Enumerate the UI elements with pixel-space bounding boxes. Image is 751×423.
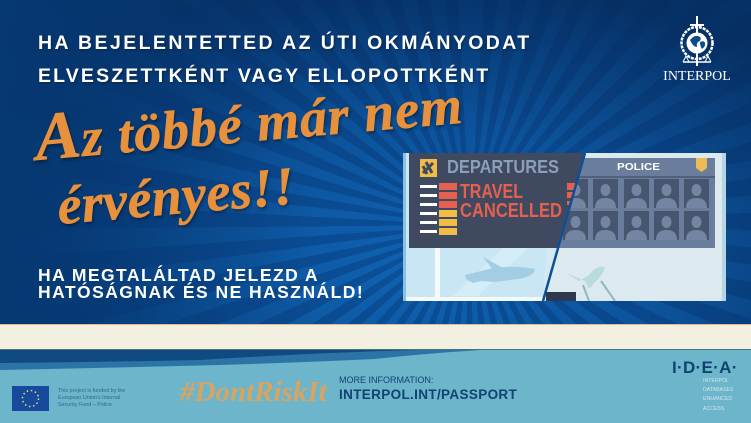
background: blue sunburst [0,0,751,325]
airplane silhouette [465,257,535,283]
headline line two: érvényes!! [55,155,297,236]
IDEA logo [672,358,738,412]
heading: lost or stolen travel document: HA BEJELENTETTED AZ ÚTI OKMÁNYODAT [38,32,532,54]
plane icon tile [420,159,437,177]
icon: sword and scales emblem [682,16,712,66]
instruction text: HATÓSÁGNAK ÉS NE HASZNÁLD! [38,282,364,302]
instruction text [38,265,364,302]
EU funding text [58,388,126,408]
police label: POLICE [617,161,660,173]
mugshot grid [563,179,709,240]
instruction text: HA MEGTALÁLTAD JELEZD A [38,265,319,285]
IDEA expansion: ACCESS [703,406,724,412]
cream band [0,324,751,350]
headline: script text [32,75,465,236]
flight rows [420,183,576,235]
police board [553,158,715,248]
EU funding text: Security Fund – Police [58,402,112,408]
blue diagonal divider [543,153,585,301]
IDEA expansion: ENHANCED [703,396,732,402]
heading: lost or stolen travel document: ELVESZETTKÉNT VAGY ELLOPOTTKÉNT [38,65,490,87]
headline line one: Az többé már nem [32,75,465,175]
security camera [546,267,615,301]
airport window [403,153,726,301]
logo wordmark: INTERPOL [663,69,731,84]
logo: INTERPOL [663,16,731,84]
EU flag [12,386,49,411]
footer wave [0,350,479,370]
departures board: CANCELLED [460,200,562,222]
EU funding text: This project is funded by the [58,388,125,394]
IDEA letters: I·D·E·A· [672,358,738,377]
website link: INTERPOL.INT/PASSPORT [339,387,517,402]
footer panel [0,350,751,423]
more information [339,375,517,402]
police badge [696,158,707,172]
heading: lost or stolen travel document [38,32,532,87]
illustration: departures board and police board [403,153,726,301]
departures board [409,153,585,248]
IDEA expansion: INTERPOL [703,378,729,384]
travel cancelled message: TRAVEL [460,181,523,203]
IDEA expansion: DATABASES [703,387,733,393]
IDEA expansion [703,378,734,412]
EU funding text: European Union's Internal [58,395,120,401]
departures label: DEPARTURES [447,157,559,177]
more information label: MORE INFORMATION: [339,375,433,385]
hashtag: #DontRiskIt [180,376,327,408]
